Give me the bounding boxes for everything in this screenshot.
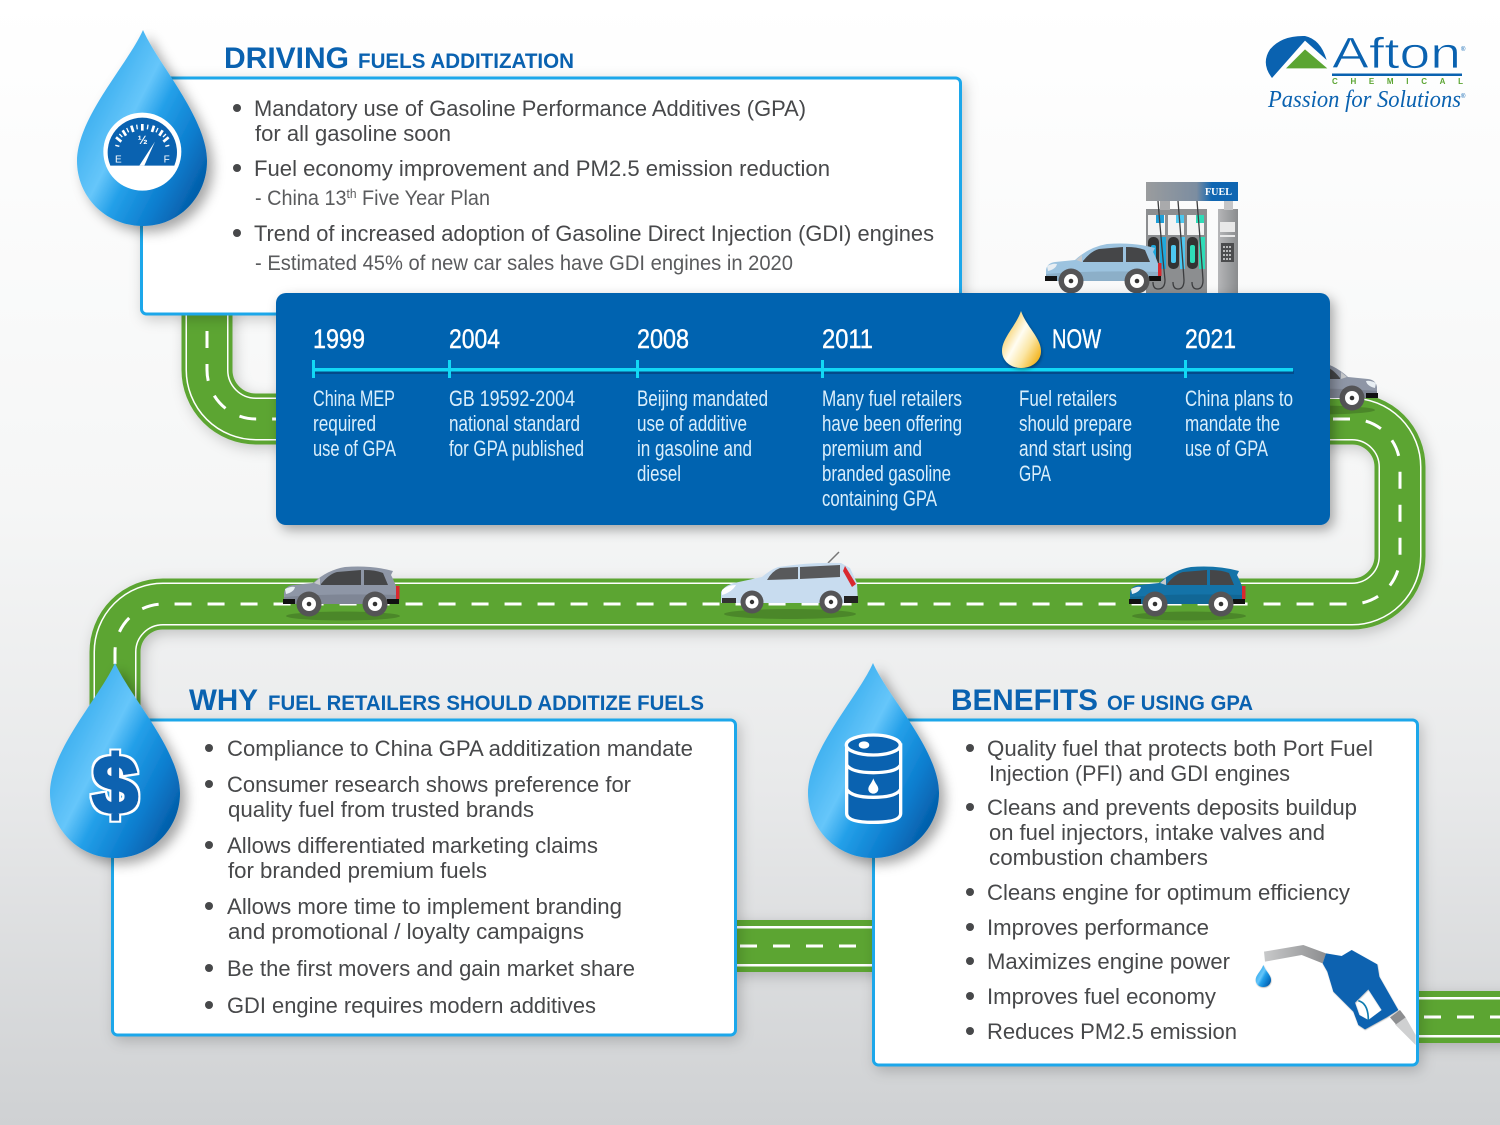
car: light blue at pump xyxy=(1045,244,1162,294)
oil barrel xyxy=(846,735,901,822)
icon: oil drop at NOW xyxy=(1002,311,1041,368)
bullet list: benefits: Improves performance xyxy=(987,915,1209,940)
timeline: 2004 xyxy=(449,324,584,461)
timeline: now: and start using xyxy=(1019,436,1132,461)
bullet list: why: Consumer research shows preference for xyxy=(227,772,631,797)
panel: benefits of using GPA xyxy=(874,720,1418,1065)
bullet list: benefits: Maximizes engine power xyxy=(987,949,1230,974)
bullet list: driving: Fuel economy improvement and PM2.5 emission reduction xyxy=(254,156,830,181)
pump right column xyxy=(1218,200,1238,293)
timeline: 2011: 2011 xyxy=(822,324,873,354)
heading: why: FUEL RETAILERS SHOULD ADDITIZE FUELS xyxy=(268,692,704,715)
timeline: 1999 xyxy=(313,324,396,461)
bullet list: benefits: Reduces PM2.5 emission xyxy=(987,1019,1237,1044)
timeline: 2008 xyxy=(637,324,768,486)
logo: Afton Chemical: CHEMICAL xyxy=(1332,77,1463,86)
panel: timeline xyxy=(276,293,1330,525)
icon: fuel pump station xyxy=(1146,182,1238,293)
fuel gauge: E xyxy=(115,155,122,166)
timeline: 2011: branded gasoline xyxy=(822,461,951,486)
timeline: 2004: for GPA published xyxy=(449,436,584,461)
timeline: 2021: mandate the xyxy=(1185,411,1280,436)
heading: why: WHY xyxy=(189,684,258,717)
heading: benefits: BENEFITS xyxy=(951,684,1098,717)
logo: Afton Chemical: ® xyxy=(1461,93,1466,100)
bullet list: driving: Five Year Plan xyxy=(357,186,490,210)
timeline: now: Fuel retailers xyxy=(1019,386,1117,411)
timeline: 2008: use of additive xyxy=(637,411,747,436)
bullet list: why: and promotional / loyalty campaigns xyxy=(228,919,584,944)
icon: barrel drop xyxy=(808,663,939,858)
pump body xyxy=(1146,200,1207,293)
canopy sign: FUEL xyxy=(1205,187,1232,198)
heading: driving fuels additization: DRIVING xyxy=(224,42,349,75)
fuel gauge: F xyxy=(164,155,170,166)
timeline: 2011: have been offering xyxy=(822,411,962,436)
timeline: 2011 xyxy=(822,324,962,511)
bullet list: why: Allows differentiated marketing claims xyxy=(227,833,598,858)
road: exit right xyxy=(1410,991,1500,1043)
timeline: 1999: use of GPA xyxy=(313,436,396,461)
fuel gauge xyxy=(103,113,181,191)
heading: driving fuels additization xyxy=(224,42,574,75)
icon: fuel gauge drop xyxy=(77,30,207,226)
timeline: 2021: 2021 xyxy=(1185,324,1236,354)
timeline: 2004: GB 19592-2004 xyxy=(449,386,575,411)
bullet list: why: Compliance to China GPA additization mandate xyxy=(227,736,693,761)
bullet list: benefits: Cleans and prevents deposits buildup xyxy=(987,795,1357,820)
timeline: now: should prepare xyxy=(1019,411,1132,436)
timeline: 2008: in gasoline and xyxy=(637,436,752,461)
car: grey on road xyxy=(283,566,400,620)
bullet list: benefits xyxy=(966,736,1373,1044)
road: segment between panels xyxy=(730,920,880,972)
road: main winding section xyxy=(115,419,1400,730)
timeline: 2011: Many fuel retailers xyxy=(822,386,962,411)
panel: driving fuels additization xyxy=(142,78,960,314)
heading: benefits: OF USING GPA xyxy=(1107,692,1253,715)
bullet list: why: GDI engine requires modern additives xyxy=(227,993,596,1018)
bullet list: driving xyxy=(233,96,934,275)
logo mark xyxy=(1266,36,1327,78)
logo: Afton Chemical: ® xyxy=(1461,46,1466,53)
timeline: 1999: required xyxy=(313,411,376,436)
bullet list: benefits: Improves fuel economy xyxy=(987,984,1217,1009)
timeline: now: GPA xyxy=(1019,461,1051,486)
car: blue on road xyxy=(1129,566,1246,620)
panel: why fuel retailers should additize xyxy=(112,720,736,1035)
timeline: 2008: 2008 xyxy=(637,324,689,354)
timeline: now: NOW xyxy=(1052,324,1101,354)
bullet list: why xyxy=(205,736,693,1018)
road: upper bend xyxy=(207,305,300,419)
logo: Afton Chemical xyxy=(1266,29,1466,113)
timeline axis xyxy=(312,360,1294,378)
timeline: 2004: national standard xyxy=(449,411,580,436)
timeline: 2011: containing GPA xyxy=(822,486,937,511)
timeline: 2021 xyxy=(1185,324,1293,461)
bullet list: why: for branded premium fuels xyxy=(228,858,487,883)
bullet list: driving: Trend of increased adoption of Gasoline Direct Injection (GDI) engines xyxy=(254,221,934,246)
timeline: now xyxy=(1019,324,1132,486)
bullet list: benefits: Quality fuel that protects both Port Fuel xyxy=(987,736,1373,761)
bullet list: driving: - China 13 xyxy=(255,186,354,210)
bullet list: why: Allows more time to implement branding xyxy=(227,894,622,919)
timeline: 2004: 2004 xyxy=(449,324,500,354)
car: grey emerging behind timeline xyxy=(1261,360,1378,414)
bullet list: benefits: Cleans engine for optimum efficiency xyxy=(987,880,1351,905)
heading: why xyxy=(189,684,704,717)
heading: benefits xyxy=(951,684,1253,717)
logo: Afton Chemical: Passion for Solutions xyxy=(1267,87,1461,113)
timeline: 1999: 1999 xyxy=(313,324,365,354)
bullet list: driving: - Estimated 45% of new car sales have GDI engines in 2020 xyxy=(255,251,793,275)
timeline: 2008: diesel xyxy=(637,461,681,486)
car: white hatchback on road xyxy=(721,552,858,619)
logo: Afton Chemical: Afton xyxy=(1332,29,1461,78)
bullet list: driving: for all gasoline soon xyxy=(255,121,451,146)
bullet list: benefits: Injection (PFI) and GDI engines xyxy=(989,761,1290,786)
bullet list: driving: th xyxy=(347,186,357,201)
timeline: 2008: Beijing mandated xyxy=(637,386,768,411)
bullet list: driving: Mandatory use of Gasoline Performance Additives (GPA) xyxy=(254,96,806,121)
timeline: 2011: premium and xyxy=(822,436,922,461)
bullet list: why: quality fuel from trusted brands xyxy=(228,797,534,822)
fuel gauge: ½ xyxy=(138,133,148,147)
timeline: 2021: use of GPA xyxy=(1185,436,1268,461)
bullet list: why: Be the first movers and gain market share xyxy=(227,956,635,981)
bullet list: benefits: on fuel injectors, intake valves and xyxy=(989,820,1325,845)
icon: dollar drop xyxy=(50,663,180,858)
timeline: 1999: China MEP xyxy=(313,386,395,411)
bullet list: benefits: combustion chambers xyxy=(989,845,1208,870)
dollar sign: $ xyxy=(92,740,138,831)
icon: fuel nozzle xyxy=(1256,945,1416,1045)
timeline: 2021: China plans to xyxy=(1185,386,1293,411)
heading: driving fuels additization: FUELS ADDITIZATION xyxy=(358,50,574,73)
